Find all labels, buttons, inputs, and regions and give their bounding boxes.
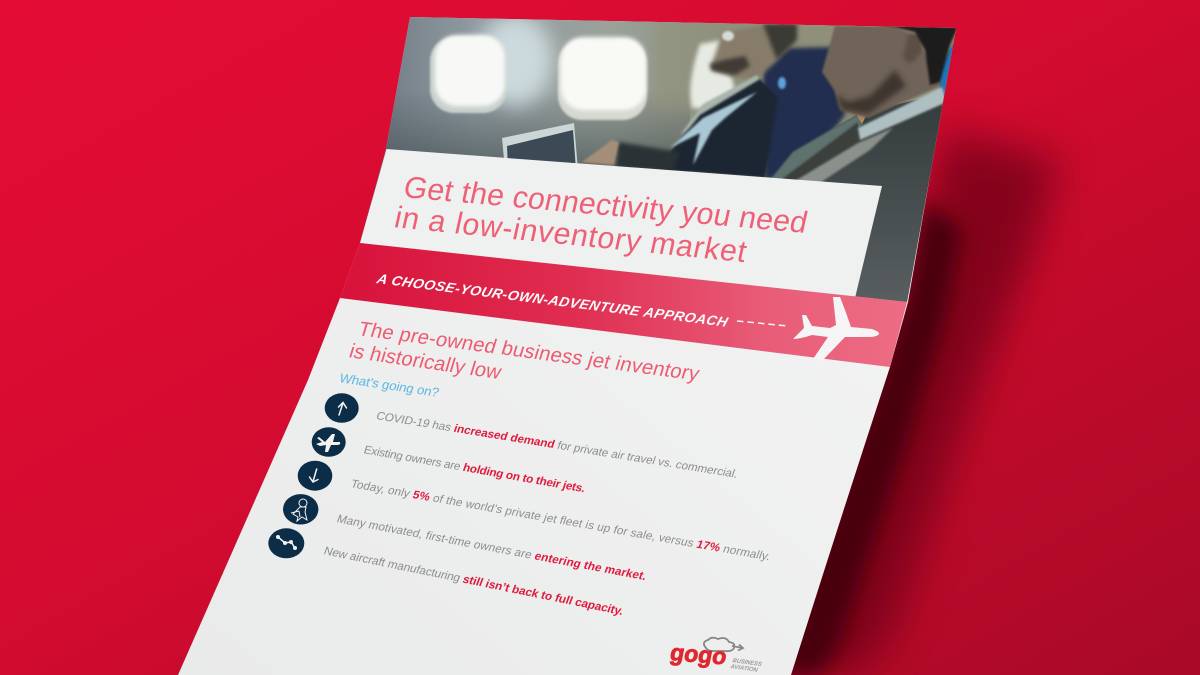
- icon: plane: [312, 427, 346, 457]
- banner heading: A CHOOSE-YOUR-OWN-ADVENTURE APPROACH: [374, 271, 731, 330]
- blue seat sliver: [939, 43, 954, 94]
- text: reason five: New aircraft manufacturing still isn’t back to full capacity.: [322, 545, 626, 618]
- title: Get the connectivity you need: [400, 170, 811, 240]
- icon: cabin window one: [430, 35, 507, 113]
- heading: section: is historically low: [347, 341, 504, 384]
- photo: two businessmen in aircraft cabin: [350, 10, 970, 310]
- text: reason four: Many motivated, first-time owners are entering the market.: [335, 513, 649, 583]
- banner: red ribbon: [340, 243, 907, 367]
- business aviation text: [729, 657, 763, 674]
- list: five reasons: [268, 393, 772, 618]
- icon: up arrow: [325, 393, 359, 423]
- flight path dashes: [737, 321, 788, 326]
- text: reason one: COVID-19 has increased demand for private air travel vs. commercial.: [375, 411, 739, 481]
- wordmark: gogo: [668, 639, 729, 669]
- front passenger: [770, 25, 960, 310]
- title: in a low-inventory market: [391, 200, 750, 269]
- paper cast shadow: [770, 130, 1060, 675]
- icon: down arrow: [298, 461, 332, 491]
- panel: title background: [360, 149, 882, 298]
- tan wall behind passengers: [658, 22, 955, 98]
- icon: cabin window two: [558, 37, 647, 120]
- logo: gogo business aviation: [668, 638, 763, 674]
- text: reason three: Today, only 5% of the world’s private jet fleet is up for sale, versus 17% normally.: [349, 478, 772, 563]
- icon: person with rocket: [283, 494, 318, 524]
- icon: cloud: [704, 638, 743, 651]
- icon: white airplane: [793, 297, 879, 361]
- rear passenger: [582, 23, 797, 178]
- seat behind rear passenger: [763, 47, 845, 180]
- business aviation text: BUSINESS: [731, 657, 763, 668]
- icon: cabin window three: [690, 40, 735, 110]
- icon: trend line: [268, 528, 304, 558]
- laptop: [502, 123, 578, 164]
- text: reason two: Existing owners are holding on to their jets.: [362, 444, 587, 495]
- heading: section: The pre-owned business jet inventory: [356, 319, 703, 385]
- subheading: What’s going on?: [338, 371, 441, 400]
- title: [391, 170, 811, 269]
- business aviation text: AVIATION: [729, 663, 759, 674]
- paper sheet: [178, 17, 956, 675]
